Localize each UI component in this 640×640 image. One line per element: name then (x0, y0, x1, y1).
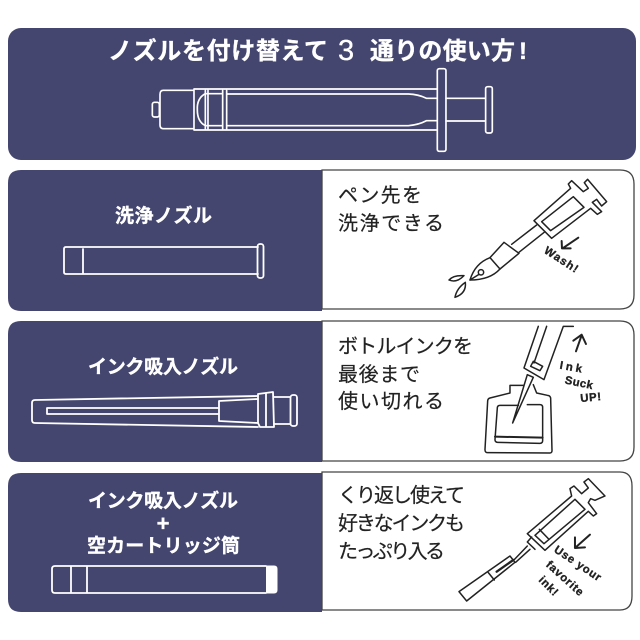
icon: syringe filling cartridge (459, 479, 605, 601)
title: ! (519, 38, 527, 65)
text: wash description: ペン先を (338, 184, 422, 207)
title: ノズルを付け替えて (108, 37, 328, 65)
label: Ink Suck UP!: Ink (559, 360, 584, 376)
label: Use your favorite ink! (536, 544, 604, 599)
heading: ink nozzle plus empty cartridge: 空カートリッジ筒 (87, 535, 240, 557)
heading: ink nozzle plus empty cartridge: + (157, 511, 169, 536)
heading: wash nozzle: 洗浄ノズル (115, 204, 212, 227)
heading: ink nozzle plus empty cartridge: インク吸入ノズル (88, 489, 238, 512)
text: wash description: 洗浄できる (338, 212, 444, 235)
text: cartridge description: くり返し使えて (338, 484, 465, 507)
text: wash description (338, 184, 444, 235)
label: Ink Suck UP!: UP! (580, 391, 601, 405)
panel: ink suction nozzle (8, 321, 322, 462)
text: ink suction description (338, 335, 473, 413)
label: Wash!: Wash! (542, 245, 580, 276)
text: cartridge description: 好きなインクも (338, 512, 465, 535)
text: ink suction description: 使い切れる (338, 390, 444, 413)
panel: wash nozzle (8, 170, 322, 311)
icon: syringe (152, 69, 492, 151)
icon: pen being washed (449, 179, 607, 297)
panel: ink suction description (322, 321, 634, 461)
title: 3 (338, 35, 354, 67)
text: cartridge description: たっぷり入る (338, 541, 445, 563)
title (108, 35, 527, 67)
text: cartridge description (338, 484, 465, 563)
title: 通りの使い方 (370, 38, 515, 65)
icon: ink bottle (485, 326, 601, 453)
panel: header (8, 28, 636, 160)
label: Use your favorite ink!: favorite (543, 559, 586, 599)
panel: cartridge description (322, 472, 632, 610)
icon: cartridge (52, 566, 278, 594)
panel: ink nozzle and cartridge (8, 473, 322, 612)
label: Use your favorite ink!: Use your (552, 544, 604, 584)
label: Ink Suck UP!: Suck (564, 375, 595, 392)
text: ink suction description: ボトルインクを (338, 335, 473, 358)
panel: wash description (322, 170, 634, 309)
label: Ink Suck UP! (559, 360, 601, 405)
text: ink suction description: 最後まで (338, 363, 420, 386)
icon: ink suction nozzle (32, 392, 297, 427)
icon: wash nozzle (64, 244, 264, 278)
label: Use your favorite ink!: ink! (536, 574, 560, 599)
heading: ink nozzle plus empty cartridge (87, 489, 240, 557)
heading: ink suction nozzle: インク吸入ノズル (88, 355, 238, 378)
